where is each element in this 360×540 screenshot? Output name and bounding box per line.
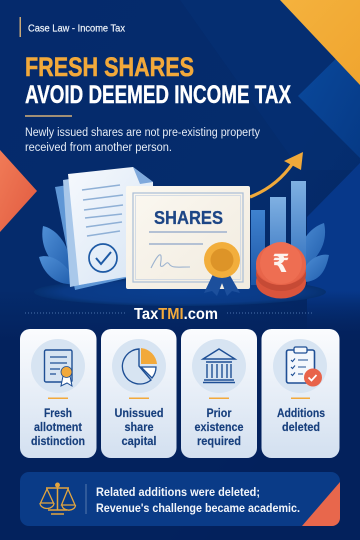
icon: certificate bbox=[44, 350, 72, 386]
card: additions deleted bbox=[262, 329, 340, 458]
leaves right bbox=[296, 223, 329, 282]
document stack bbox=[55, 167, 154, 290]
growth arrow bbox=[250, 152, 303, 197]
icon: pie chart bbox=[122, 348, 157, 384]
conclusion banner bbox=[20, 472, 340, 526]
bar chart bbox=[251, 181, 306, 285]
conclusion banner: Related additions were deleted; bbox=[96, 485, 260, 499]
share certificate: SHARES bbox=[154, 208, 223, 228]
illustration bbox=[34, 152, 329, 306]
subtitle bbox=[25, 127, 260, 154]
subtitle: Newly issued shares are not pre-existing property bbox=[25, 127, 260, 139]
icon: scales of justice bbox=[40, 483, 76, 514]
title bbox=[25, 52, 291, 109]
rupee coins: ₹ bbox=[272, 249, 290, 278]
card: unissued share capital: Unissued bbox=[114, 406, 164, 420]
card: prior existence required bbox=[181, 329, 257, 458]
card: additions deleted: deleted bbox=[282, 420, 320, 434]
card: fresh allotment distinction: allotment bbox=[34, 420, 82, 434]
card: fresh allotment distinction: distinction bbox=[31, 434, 85, 448]
card: additions deleted: Additions bbox=[277, 406, 325, 420]
brand: TaxTMI.com: TaxTMI.com bbox=[134, 306, 218, 323]
icon: clipboard bbox=[286, 347, 322, 386]
leaves left bbox=[39, 226, 76, 284]
icon: courthouse bbox=[203, 349, 235, 382]
share certificate bbox=[126, 186, 250, 296]
rupee coins bbox=[256, 242, 306, 298]
card: prior existence required: Prior bbox=[206, 406, 232, 420]
decoration: blue diamond right bbox=[298, 35, 360, 158]
floor ellipse bbox=[34, 278, 326, 306]
card: unissued share capital bbox=[101, 329, 176, 458]
card: unissued share capital: share bbox=[124, 420, 154, 434]
decoration: orange corner bbox=[280, 0, 360, 85]
card: fresh allotment distinction: Fresh bbox=[44, 406, 72, 420]
decoration: blue panel behind chart bbox=[307, 163, 360, 335]
icon: check circle bbox=[89, 244, 117, 272]
card: prior existence required: required bbox=[197, 434, 241, 448]
header tag: Case Law - Income Tax bbox=[28, 22, 126, 34]
decoration: red arrow left bbox=[0, 150, 37, 232]
card: unissued share capital: capital bbox=[122, 434, 156, 448]
card: prior existence required: existence bbox=[194, 420, 244, 434]
conclusion banner: Revenue's challenge became academic. bbox=[96, 501, 300, 515]
card: fresh allotment distinction bbox=[20, 329, 96, 458]
subtitle: received from another person. bbox=[25, 142, 172, 154]
icon: ribbon seal bbox=[204, 242, 240, 296]
title: FRESH SHARES bbox=[25, 52, 194, 82]
header tag bbox=[20, 17, 126, 37]
